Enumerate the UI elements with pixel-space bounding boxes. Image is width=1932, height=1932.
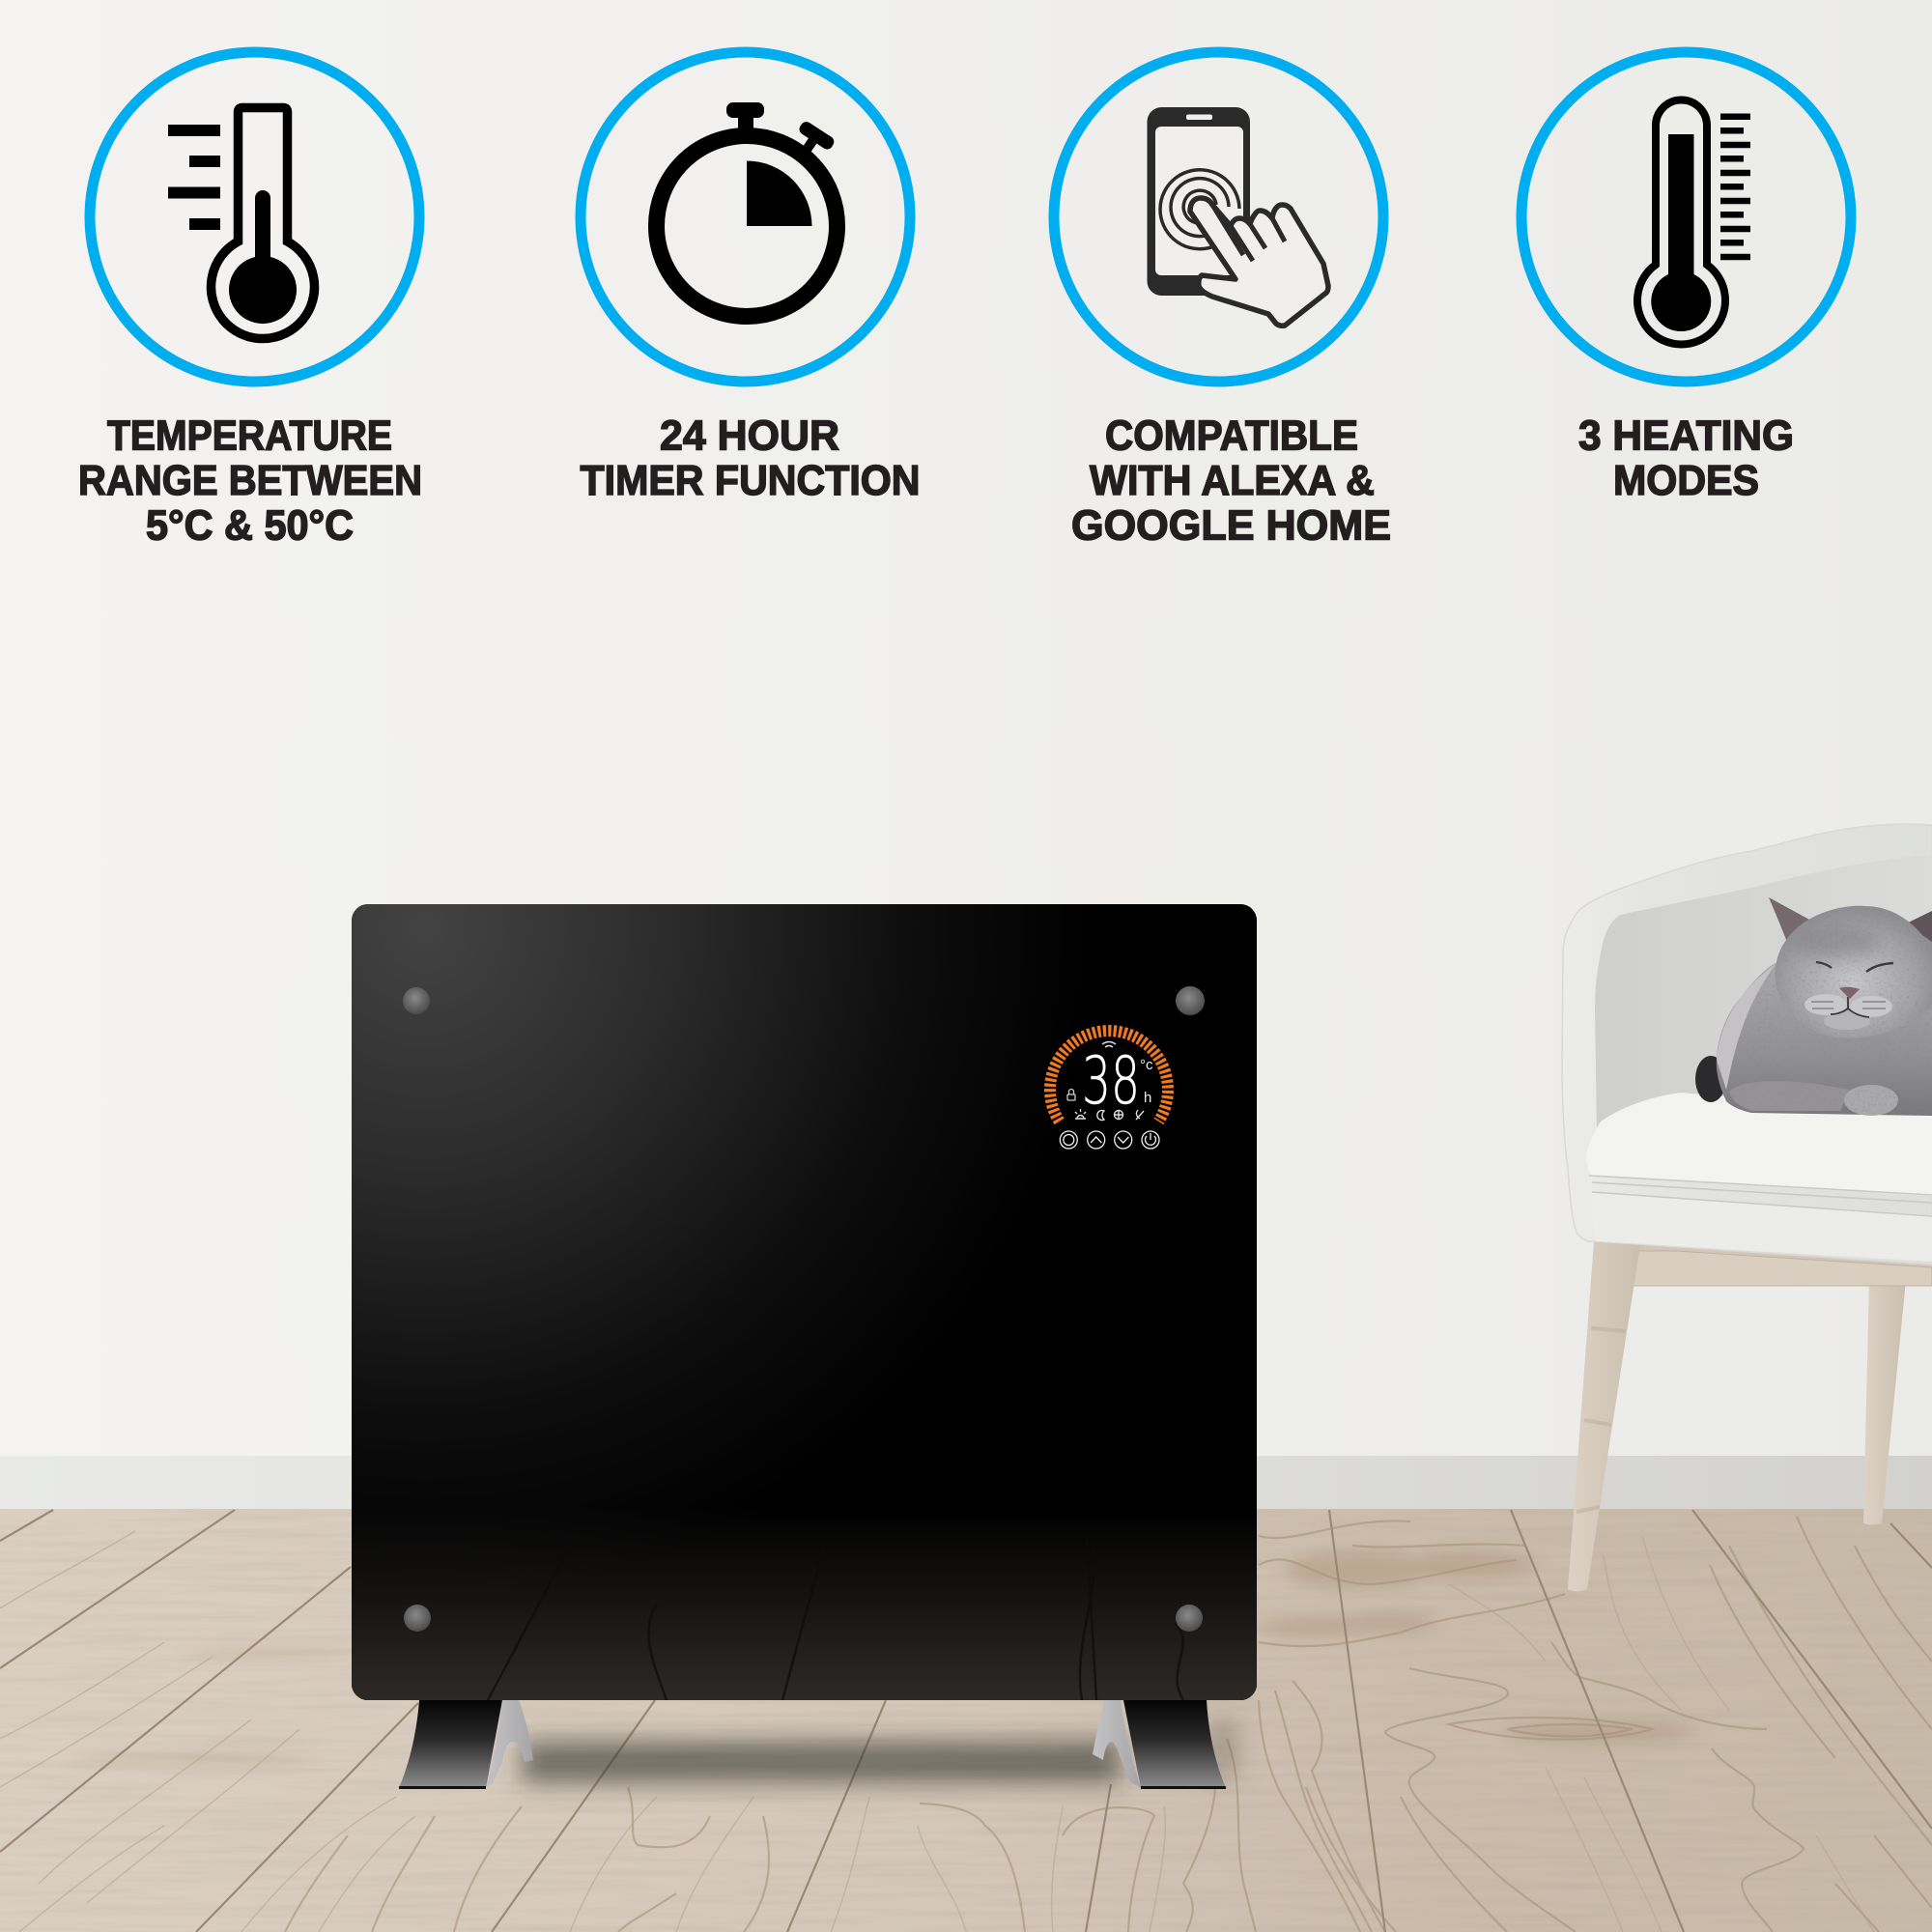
head: [1776, 906, 1932, 1038]
feature: timer: [580, 52, 920, 504]
mode icons: [1075, 1109, 1144, 1121]
label: 5°C & 50°C: [146, 502, 354, 549]
label: [580, 412, 920, 504]
icon: phone and hand: [1148, 107, 1328, 326]
temperature arc: [1050, 1031, 1168, 1122]
chair shell: [1562, 824, 1932, 1264]
cat: [1695, 897, 1932, 1116]
chair inner back: [1595, 855, 1932, 1130]
wooden floor: [0, 1509, 1932, 1932]
label: TEMPERATURE: [107, 412, 392, 460]
back leg: [1863, 1280, 1906, 1524]
label: TIMER FUNCTION: [580, 457, 920, 504]
wall background: [0, 0, 1932, 1459]
touch button: menu: [1060, 1131, 1077, 1149]
label: MODES: [1613, 457, 1759, 504]
blue ring: [1054, 52, 1383, 382]
heater shadow on floor: [522, 1719, 1236, 1782]
paw: [1844, 1085, 1898, 1116]
bolt: bottom right: [1176, 1605, 1203, 1632]
label: [78, 412, 422, 549]
hours unit: h: [1144, 1090, 1151, 1106]
label: RANGE BETWEEN: [78, 457, 422, 504]
right eye: [1866, 963, 1893, 972]
heater control display: [1050, 1031, 1168, 1149]
degree unit: °c: [1140, 1057, 1153, 1073]
body: [1717, 962, 1932, 1116]
icon: thermometer with scale: [168, 108, 315, 339]
chair: [1562, 824, 1932, 1592]
feature: temperature range: [78, 52, 422, 549]
bolt: bottom left: [404, 1605, 431, 1632]
touch button: up: [1088, 1131, 1105, 1149]
lock icon: [1067, 1090, 1075, 1100]
tail: [1695, 1056, 1726, 1102]
front leg: [1568, 1241, 1640, 1592]
label: [1578, 412, 1794, 504]
right ear: [1898, 911, 1932, 952]
label: 24 HOUR: [660, 412, 839, 460]
label: WITH ALEXA &: [1090, 457, 1375, 504]
bolt: top left: [403, 987, 430, 1014]
forehead shading: [1792, 926, 1879, 957]
feature: heating modes: [1521, 52, 1851, 504]
icon: thermometer: [1637, 100, 1750, 344]
nose: [1839, 987, 1860, 999]
heater right foot: [1093, 1699, 1226, 1789]
icon: stopwatch: [657, 102, 837, 317]
label: GOOGLE HOME: [1071, 502, 1391, 549]
heater left foot: [399, 1700, 533, 1789]
back highlight: [1717, 964, 1776, 1090]
wooden frame: [1633, 1241, 1932, 1286]
seat lower cushion: [1592, 1191, 1932, 1262]
left ear: [1769, 897, 1811, 942]
label: COMPATIBLE: [1105, 412, 1358, 460]
muzzle: [1804, 994, 1892, 1030]
label: [1071, 412, 1391, 549]
left eye: [1816, 962, 1832, 968]
bolt: top right: [1176, 986, 1205, 1015]
blue ring: [1521, 52, 1851, 382]
temperature digits: 38: [1082, 1043, 1140, 1120]
wifi icon: [1102, 1041, 1116, 1047]
skirting board: [0, 1456, 1932, 1509]
touch button: power: [1142, 1131, 1159, 1149]
heater glass panel: [352, 904, 1257, 1700]
touch button: down: [1115, 1131, 1132, 1149]
blue ring: [581, 52, 910, 382]
label: 3 HEATING: [1578, 412, 1794, 460]
seat cushion: [1586, 1093, 1932, 1196]
feature: smart home compatibility: [1054, 52, 1391, 549]
blue ring: [90, 52, 419, 382]
forelegs: [1729, 1081, 1850, 1111]
